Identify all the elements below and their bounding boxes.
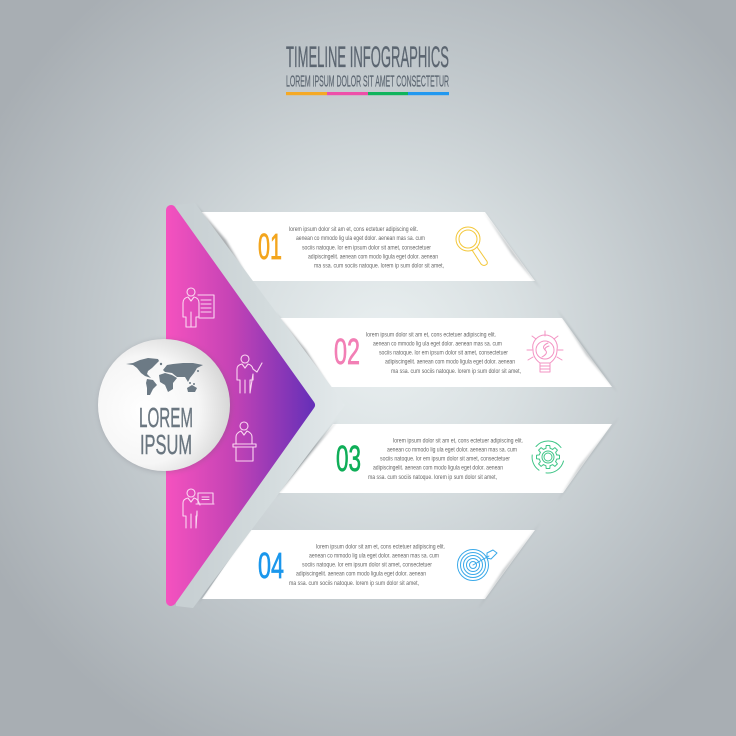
badge disc bbox=[98, 339, 230, 471]
title colour bar bbox=[286, 92, 449, 95]
band shadow on ribbons bbox=[195, 204, 338, 604]
ribbon 3 text bbox=[368, 438, 523, 481]
ribbon 4 fold shadow bbox=[478, 522, 541, 609]
ribbon 3 text: ma ssa. cum sociis natoque. lorem ip sum dolor sit amet, bbox=[368, 474, 497, 481]
purple pink triangle bbox=[171, 210, 310, 601]
ribbon 4 text: lorem ipsum dolor sit am et, cons ectetuer adipiscing elit. bbox=[316, 544, 445, 551]
ribbon 1 text: adipiscingelit. aenean com modo ligula eget dolor. aenean bbox=[308, 253, 438, 260]
ribbon 2 bbox=[280, 309, 618, 393]
icon: target bbox=[458, 550, 497, 580]
ribbon 1 text: ma ssa. cum sociis natoque. lorem ip sum dolor sit amet, bbox=[314, 263, 444, 270]
ribbon 2 text: sociis natoque. lor em ipsum dolor sit amet, consectetuer bbox=[379, 350, 509, 357]
ribbon 3 shape bbox=[279, 424, 612, 493]
ribbon 4 text: sociis natoque. lor em ipsum dolor sit amet, consectetuer bbox=[302, 562, 433, 569]
icon: presenter with pointer bbox=[237, 355, 262, 393]
ribbon 2 text bbox=[366, 331, 521, 375]
ribbon 4 number: 04 bbox=[258, 545, 284, 586]
ribbon 3 text: aenean co mmodo lig ula eget dolor. aenean mas sa. cum bbox=[387, 447, 517, 454]
icon: magnifier bbox=[456, 227, 487, 266]
icon: presenter with document bbox=[183, 288, 214, 327]
badge label: IPSUM bbox=[140, 429, 192, 460]
icon: light bulb bbox=[527, 331, 563, 372]
ribbon 1 text: aenean co mmodo lig ula eget dolor. aenean mas sa. cum bbox=[296, 235, 425, 242]
ribbon 1 fold shadow bbox=[483, 210, 541, 289]
icon: speaker at podium bbox=[233, 422, 256, 461]
ribbon 2 text: ma ssa. cum sociis natoque. lorem ip sum dolor sit amet, bbox=[391, 368, 521, 375]
ribbon 1 bbox=[200, 210, 541, 289]
ribbon 1 text: lorem ipsum dolor sit am et, cons ectetuer adipiscing elit. bbox=[289, 226, 418, 233]
ribbon 3 text: lorem ipsum dolor sit am et, cons ectetuer adipiscing elit. bbox=[393, 438, 523, 445]
circle badge bbox=[98, 339, 231, 472]
chevron band behind triangle bbox=[176, 203, 345, 608]
ribbon 3 number: 03 bbox=[336, 438, 361, 479]
ribbon 4 text: adipiscingelit. aenean com modo ligula eget dolor. aenean bbox=[296, 571, 426, 578]
ribbon 3 bbox=[279, 416, 620, 502]
ribbon 4 bbox=[202, 522, 541, 609]
ribbon 2 text: adipiscingelit. aenean com modo ligula eget dolor. aenean bbox=[385, 359, 515, 366]
ribbon 1 text bbox=[289, 226, 444, 270]
ribbon 3 fold shadow bbox=[557, 416, 620, 502]
badge shadow bbox=[99, 340, 231, 472]
ribbon 2 text: lorem ipsum dolor sit am et, cons ectetuer adipiscing elit. bbox=[366, 331, 496, 338]
ribbon 1 number: 01 bbox=[258, 226, 282, 267]
ribbon 2 shape bbox=[280, 318, 612, 387]
ribbon 2 number: 02 bbox=[334, 331, 360, 372]
ribbon 3 text: adipiscingelit. aenean com modo ligula eget dolor. aenean bbox=[373, 465, 503, 472]
infographic canvas: LOREM IPSUM DOLOR SIT AMET CONSECTETUR bbox=[286, 74, 449, 90]
ribbon 4 text bbox=[289, 544, 445, 587]
icon: gear bbox=[532, 441, 564, 473]
ribbon 2 text: aenean co mmodo lig ula eget dolor. aenean mas sa. cum bbox=[373, 340, 502, 347]
ribbon 4 shape bbox=[202, 530, 535, 599]
ribbon 1 text: sociis natoque. lor em ipsum dolor sit amet, consectetuer bbox=[302, 244, 432, 251]
ribbon 4 text: ma ssa. cum sociis natoque. lorem ip sum dolor sit amet, bbox=[289, 580, 419, 587]
icon: presenter with laptop bbox=[183, 489, 214, 528]
title block bbox=[286, 41, 449, 95]
ribbon 3 text: sociis natoque. lor em ipsum dolor sit amet, consectetuer bbox=[380, 456, 511, 463]
ribbon 1 shape bbox=[200, 212, 535, 281]
badge label bbox=[139, 402, 193, 460]
badge label: LOREM bbox=[139, 402, 193, 433]
icon: world map bbox=[126, 358, 203, 395]
ribbon 2 fold shadow bbox=[557, 309, 618, 393]
ribbon 4 text: aenean co mmodo lig ula eget dolor. aenean mas sa. cum bbox=[309, 553, 439, 560]
infographic canvas: TIMELINE INFOGRAPHICS bbox=[286, 41, 449, 74]
